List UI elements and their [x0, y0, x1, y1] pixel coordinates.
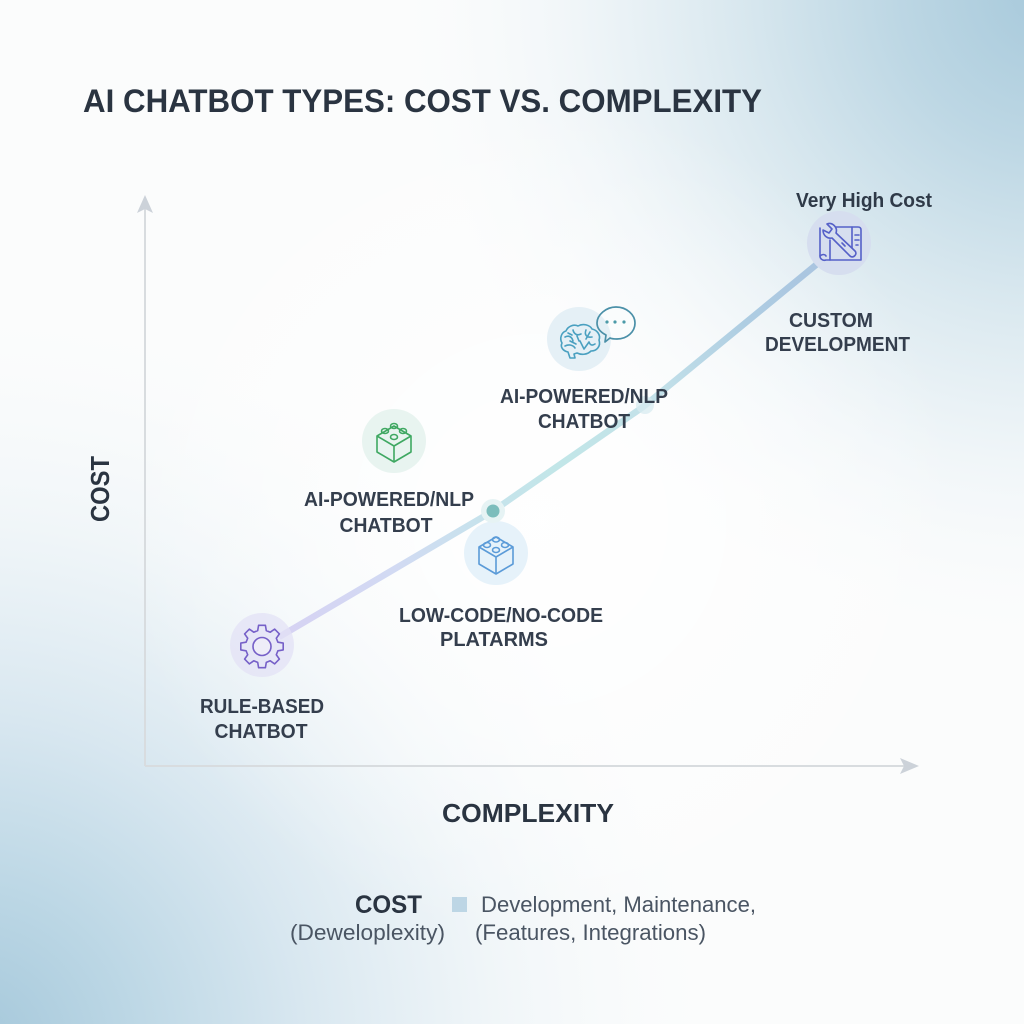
- label: custom development: CUSTOM: [789, 310, 873, 332]
- label: rule-based chatbot: RULE-BASED: [200, 696, 324, 718]
- icon: gear: [230, 613, 294, 677]
- legend heading: cost: COST: [355, 891, 422, 919]
- icon: blue blocks: [464, 521, 528, 585]
- legend text: features, integrations: (Features, Integrations): [475, 920, 706, 945]
- label: ai-powered/nlp chatbot: CHATBOT: [538, 411, 630, 433]
- label: rule-based chatbot: CHATBOT: [214, 721, 308, 743]
- label: custom development: DEVELOPMENT: [765, 334, 910, 356]
- x axis arrow: [145, 758, 919, 774]
- point: custom development: [765, 190, 932, 356]
- label: low-code/no-code platarms: PLATARMS: [440, 629, 548, 651]
- x axis label: COMPLEXITY: [442, 798, 614, 828]
- icon: brain and speech bubble: [547, 307, 635, 371]
- trend line: [279, 260, 822, 637]
- legend text: deweloplexity: (Deweloplexity): [290, 920, 445, 945]
- legend swatch: [452, 897, 467, 912]
- label: rule-based chatbot: [200, 696, 324, 743]
- icon: green blocks: [362, 409, 426, 473]
- label: ai-powered/nlp chatbot: [304, 489, 474, 537]
- label: ai-powered/nlp chatbot: AI-POWERED/NLP: [500, 386, 668, 408]
- label: low-code/no-code platarms: [399, 605, 603, 651]
- point: rule-based chatbot: [200, 613, 324, 743]
- label: ai-powered/nlp chatbot: [500, 386, 668, 433]
- legend: [290, 891, 756, 945]
- point: green blocks chatbot: [304, 409, 474, 537]
- label: ai-powered/nlp chatbot: AI-POWERED/NLP: [304, 489, 474, 511]
- midpoint marker on trend line: [481, 499, 505, 523]
- chart axes: [137, 195, 919, 774]
- label: custom development: [765, 310, 910, 356]
- legend text: development, maintenance: Development, Maintenance,: [481, 892, 756, 917]
- y axis arrow: [137, 195, 153, 766]
- label: ai-powered/nlp chatbot: CHATBOT: [340, 515, 432, 537]
- label: very high cost: Very High Cost: [796, 190, 932, 212]
- faint marker on line: [636, 396, 654, 414]
- y axis label: COST: [85, 456, 115, 522]
- icon: wrench and blueprint: [807, 211, 871, 275]
- point: low-code/no-code platforms: [399, 521, 603, 651]
- point: ai-powered/nlp chatbot upper: [500, 307, 668, 433]
- title: AI CHATBOT TYPES: COST VS. COMPLEXITY: [83, 83, 762, 119]
- label: low-code/no-code platarms: LOW-CODE/NO-CODE: [399, 605, 603, 627]
